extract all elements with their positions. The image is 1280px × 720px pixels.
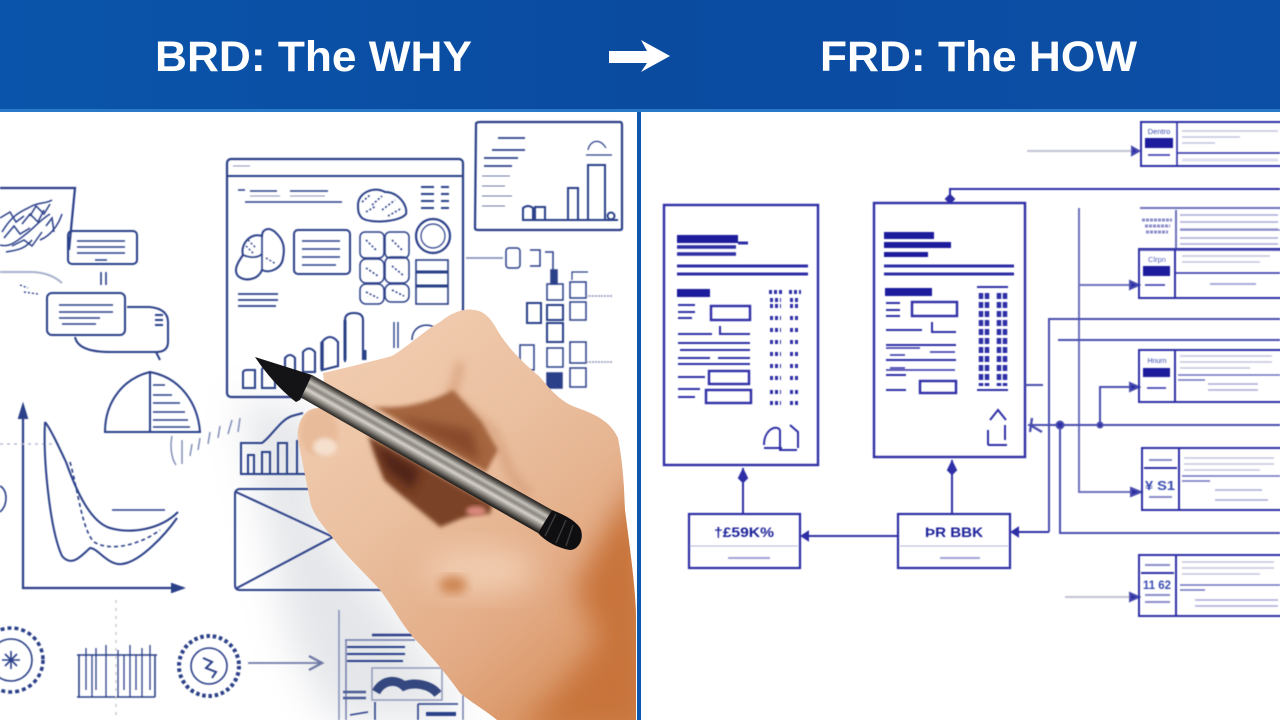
spec card two: Clrpn xyxy=(1148,255,1166,264)
finger fold shade xyxy=(450,362,530,494)
sketch: cloud note xyxy=(0,188,75,294)
arrow to bottom document xyxy=(248,656,322,670)
orange shading at wrist xyxy=(524,478,636,720)
summary box two: ÞR BBK xyxy=(925,524,983,540)
arrow: BRD to FRD xyxy=(609,40,670,72)
spec card one xyxy=(1141,122,1280,166)
chart card top right xyxy=(475,122,622,230)
pen body xyxy=(300,375,552,533)
summary box two xyxy=(898,514,1010,568)
spec card three: Hnurn xyxy=(1147,358,1167,365)
document one xyxy=(664,205,818,465)
summary box one xyxy=(689,514,800,568)
soft shadow of hand xyxy=(240,395,470,720)
thumb nail highlight xyxy=(313,438,337,456)
small bar sketch xyxy=(240,413,310,474)
flow diagram right of dashboard xyxy=(466,248,612,388)
panel: BRD sketches xyxy=(0,122,622,720)
pink web patch xyxy=(466,506,486,516)
connector arrows between documents and boxes xyxy=(739,189,1280,540)
pale palm patch xyxy=(425,546,535,594)
sketch: speech box two with bubble xyxy=(47,293,168,360)
fence barcode sketch xyxy=(77,600,157,720)
summary box one: †£59K% xyxy=(714,524,775,540)
panel: FRD flow diagram xyxy=(664,122,1280,616)
gear icon right xyxy=(179,636,239,696)
centre divider xyxy=(637,110,641,720)
spec card five xyxy=(1139,555,1280,616)
pen cap xyxy=(538,510,582,550)
spec card three xyxy=(1139,350,1280,402)
spec card one: Dentro xyxy=(1148,127,1170,136)
header banner xyxy=(0,0,1280,112)
bottom document sketch xyxy=(339,610,463,720)
network connector lines xyxy=(1025,147,1280,601)
main dashboard window xyxy=(227,159,463,397)
thumb nail bed xyxy=(300,408,338,456)
heading: BRD: BRD: The WHY xyxy=(155,33,472,81)
sketch: speech box one xyxy=(68,231,137,285)
line chart with axes xyxy=(0,405,183,592)
spec card four: ¥ S1 xyxy=(1145,478,1175,493)
spec card five: 11 62 xyxy=(1143,578,1171,592)
illustration: hand with pen xyxy=(255,300,650,720)
envelope xyxy=(235,489,400,590)
dark gap below pen xyxy=(368,436,492,527)
knuckle mark xyxy=(439,576,467,594)
shaded area above pen xyxy=(354,388,500,473)
heading: FRD: FRD: The HOW xyxy=(820,33,1137,81)
document two xyxy=(874,203,1025,457)
sketch: half pie xyxy=(105,372,240,465)
spec card two xyxy=(1139,208,1280,298)
spec card four xyxy=(1142,448,1280,510)
hand xyxy=(290,300,650,720)
gear icon left xyxy=(0,628,43,692)
pen tip xyxy=(255,357,312,402)
